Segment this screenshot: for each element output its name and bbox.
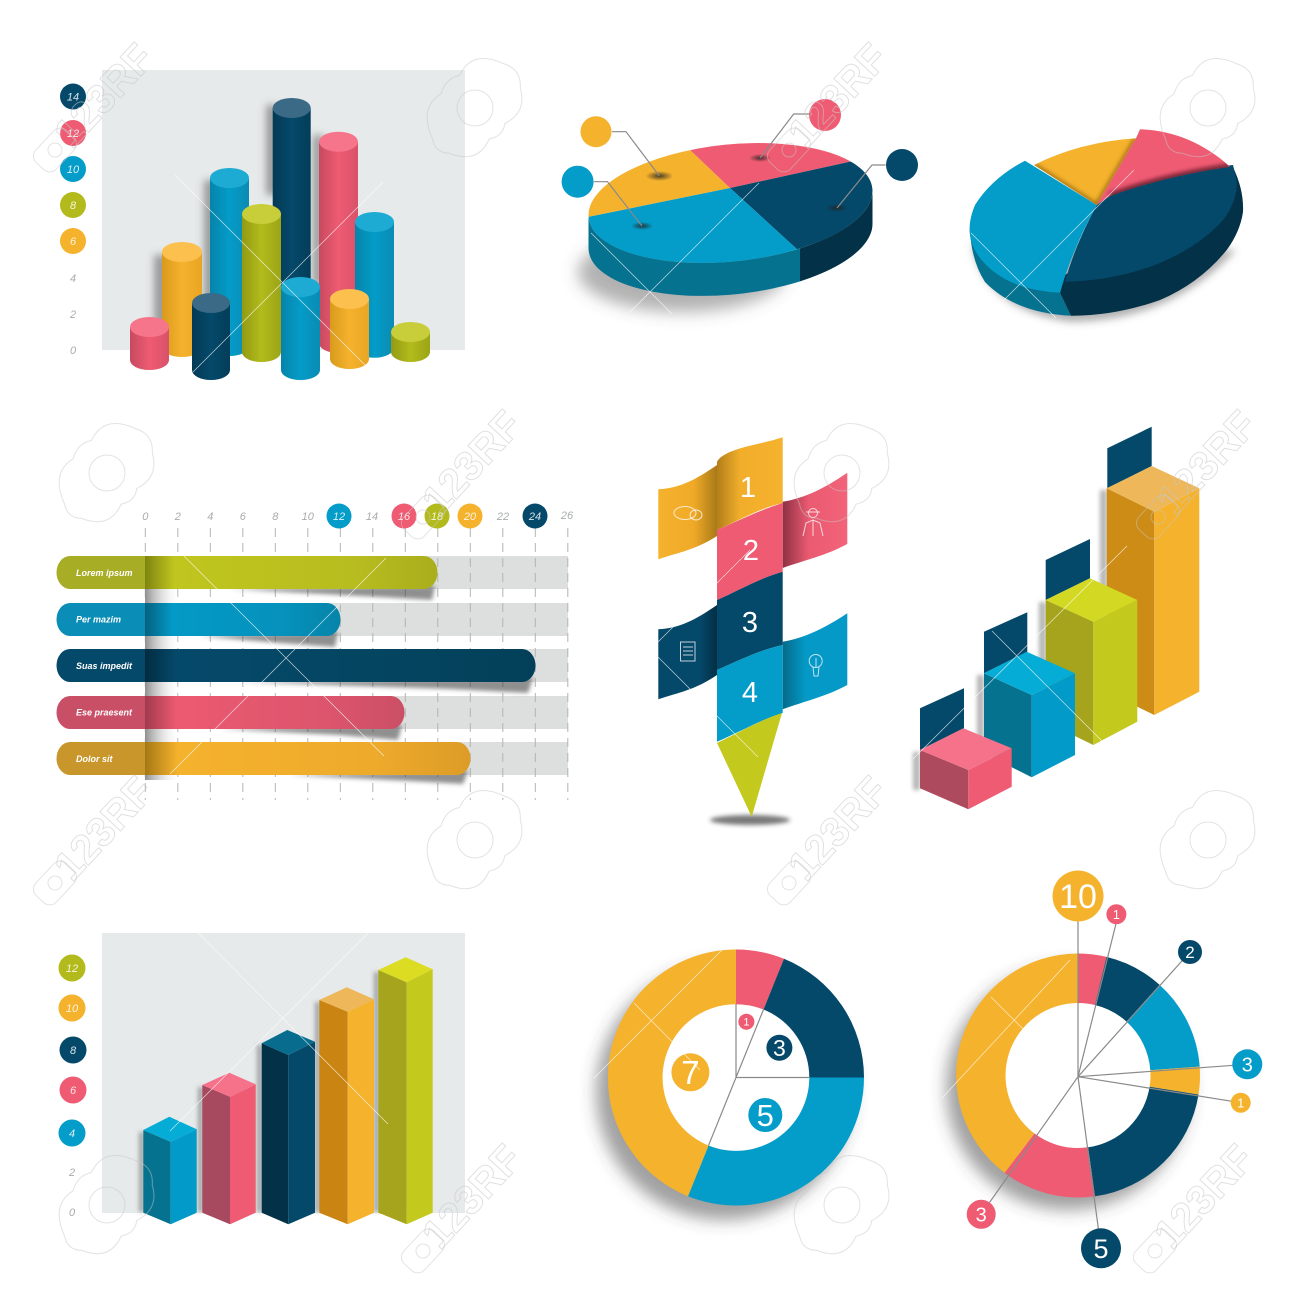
panel: 3D pie with callouts [562, 99, 918, 322]
axis scale: 2 [174, 511, 181, 523]
callout lines [981, 921, 1247, 1248]
pink block [920, 728, 1012, 809]
y axis legend: 14 [67, 92, 79, 104]
bar: Per mazim: Per mazim [76, 614, 121, 624]
y axis legend: 12 [66, 963, 78, 975]
callout 3 red: 3 [976, 1204, 987, 1226]
olive column [378, 957, 433, 1224]
bar: Dolor sit [57, 742, 471, 775]
step 3: 3 [742, 607, 758, 639]
olive block [1046, 578, 1137, 745]
axis scale: 0 [142, 511, 149, 523]
orange slice [1034, 138, 1136, 205]
y axis legend: 12 [67, 128, 79, 140]
callout 3 blue: 3 [1242, 1054, 1253, 1076]
axis scale: 12 [333, 511, 345, 523]
bar: Suas impedit: Suas impedit [76, 661, 133, 671]
axis scale: 26 [560, 510, 574, 522]
label 3: 3 [773, 1035, 786, 1061]
panel: 3D column chart [58, 933, 465, 1224]
axis scale: 20 [463, 511, 477, 523]
orange column [319, 987, 374, 1224]
navy column [262, 1030, 315, 1224]
callout 1 red [1106, 904, 1126, 924]
pencil tip [717, 713, 782, 817]
axis scale: 24 [528, 511, 541, 523]
step 2 [717, 503, 783, 600]
axis scale: 4 [207, 511, 213, 523]
pie top slices [588, 143, 872, 263]
y axis legend: 6 [70, 1085, 77, 1097]
watermark overlay: 123RF [779, 35, 897, 156]
bar: Lorem ipsum [57, 556, 438, 589]
blue side wall [970, 232, 1071, 316]
label 7 [671, 1053, 709, 1091]
watermark overlay: 123RF [779, 768, 897, 889]
bar: Ese praesent [57, 696, 405, 729]
red slice [1097, 129, 1230, 205]
watermark overlay: 123RF [45, 35, 163, 156]
dashed grid [145, 528, 568, 800]
y axis legend: 10 [66, 1003, 79, 1015]
label 3 [766, 1035, 792, 1061]
panel: donut with inner labels [596, 949, 864, 1220]
y axis legend: 4 [70, 273, 76, 285]
fold shadow [145, 585, 181, 780]
step 4 [717, 645, 783, 742]
panel: ribbon arrow steps [658, 437, 847, 825]
watermark overlay: 123RF [413, 1136, 531, 1257]
axis scale: 16 [398, 511, 411, 523]
blue slice [970, 161, 1097, 293]
donut shadow [596, 964, 852, 1220]
watermark overlay: 123RF [413, 402, 531, 523]
y axis legend: 0 [70, 345, 77, 357]
pie callouts [562, 99, 918, 226]
callout 2: 2 [1185, 943, 1195, 962]
flag: blue bulb [783, 613, 847, 709]
bar shadows [200, 586, 533, 784]
step 1: 1 [740, 472, 756, 504]
watermark overlay: 123RF [1145, 1136, 1263, 1257]
step 1 [717, 437, 783, 530]
bar: Dolor sit: Dolor sit [76, 754, 114, 764]
axis scale: 14 [366, 511, 378, 523]
panel: isometric bars with flags [913, 427, 1199, 809]
donut shadow [946, 966, 1190, 1210]
axis scale: 22 [496, 511, 509, 523]
label 7: 7 [681, 1054, 700, 1091]
orange block [1107, 466, 1199, 715]
axis scale: 8 [272, 511, 279, 523]
callout 1 orange [1231, 1093, 1251, 1113]
edge shadows [913, 490, 1107, 790]
cylinder shadows [154, 105, 323, 335]
step 4: 4 [742, 677, 758, 709]
bar: Suas impedit [57, 649, 536, 682]
icon: person [803, 508, 823, 536]
watermark overlay: 123RF [1148, 402, 1266, 523]
chart backdrop [102, 70, 465, 350]
callout 1 red: 1 [1113, 907, 1120, 922]
donut hole backing [978, 976, 1178, 1176]
navy side wall [1060, 167, 1243, 316]
pie shadow [972, 240, 1236, 322]
donut hole backing [636, 978, 836, 1178]
donut segments [956, 954, 1200, 1197]
y axis legend: 6 [70, 236, 77, 248]
callout 10 [1052, 870, 1104, 922]
flag: navy document [658, 605, 717, 699]
label 1: 1 [743, 1017, 749, 1029]
callout 5: 5 [1093, 1234, 1109, 1264]
donut segments [608, 949, 864, 1206]
radial dividers [708, 1004, 809, 1146]
blue block [984, 652, 1075, 777]
pie side wall [588, 191, 872, 296]
label 5 [748, 1098, 782, 1133]
red column [202, 1073, 256, 1224]
pie shadow [578, 232, 786, 312]
flag: orange speech [658, 465, 717, 559]
callout 5 [1081, 1228, 1121, 1268]
icon: speech bubbles [674, 506, 702, 520]
y axis legend [60, 84, 86, 357]
panel: 3D cylinder chart [60, 70, 465, 380]
label 5: 5 [757, 1098, 774, 1133]
callout 3 red [967, 1200, 996, 1229]
callout 1 orange: 1 [1237, 1096, 1244, 1110]
chart backdrop [102, 933, 465, 1213]
callout 3 blue [1232, 1049, 1262, 1079]
axis scale: 10 [302, 511, 315, 523]
column shadows [139, 972, 379, 1212]
y axis legend: 8 [70, 200, 77, 212]
y axis legend: 10 [67, 164, 80, 176]
y axis legend: 2 [68, 1167, 75, 1179]
pie anchor points [631, 154, 848, 230]
y axis legend: 4 [69, 1128, 75, 1140]
watermark overlay: 123RF [45, 768, 163, 889]
blue column [143, 1117, 197, 1224]
navy flags [920, 427, 1152, 750]
panel: horizontal bar chart [57, 504, 574, 800]
label 1 [738, 1014, 754, 1030]
icon: document [680, 642, 695, 661]
cylinders [130, 98, 430, 380]
y axis legend: 8 [70, 1045, 77, 1057]
grey tracks [145, 556, 568, 775]
base shadow [710, 815, 790, 825]
panel: donut with radial callouts [946, 870, 1262, 1268]
panel: exploded 3D pie [970, 129, 1243, 322]
y axis legend [58, 954, 86, 1219]
y axis legend: 0 [69, 1207, 76, 1219]
y axis legend: 2 [69, 309, 76, 321]
bar: Ese praesent: Ese praesent [76, 708, 133, 718]
axis scale [142, 504, 574, 528]
icon: light bulb [809, 654, 822, 676]
navy slice [1065, 165, 1237, 282]
callout 2 [1178, 940, 1202, 964]
axis scale: 6 [240, 511, 247, 523]
axis scale: 18 [431, 511, 444, 523]
step 3 [717, 572, 783, 670]
step 2: 2 [743, 535, 759, 567]
flag: red person [783, 473, 847, 568]
bar: Lorem ipsum: Lorem ipsum [76, 568, 133, 578]
callout 10: 10 [1059, 878, 1097, 916]
bar: Per mazim [57, 603, 341, 636]
